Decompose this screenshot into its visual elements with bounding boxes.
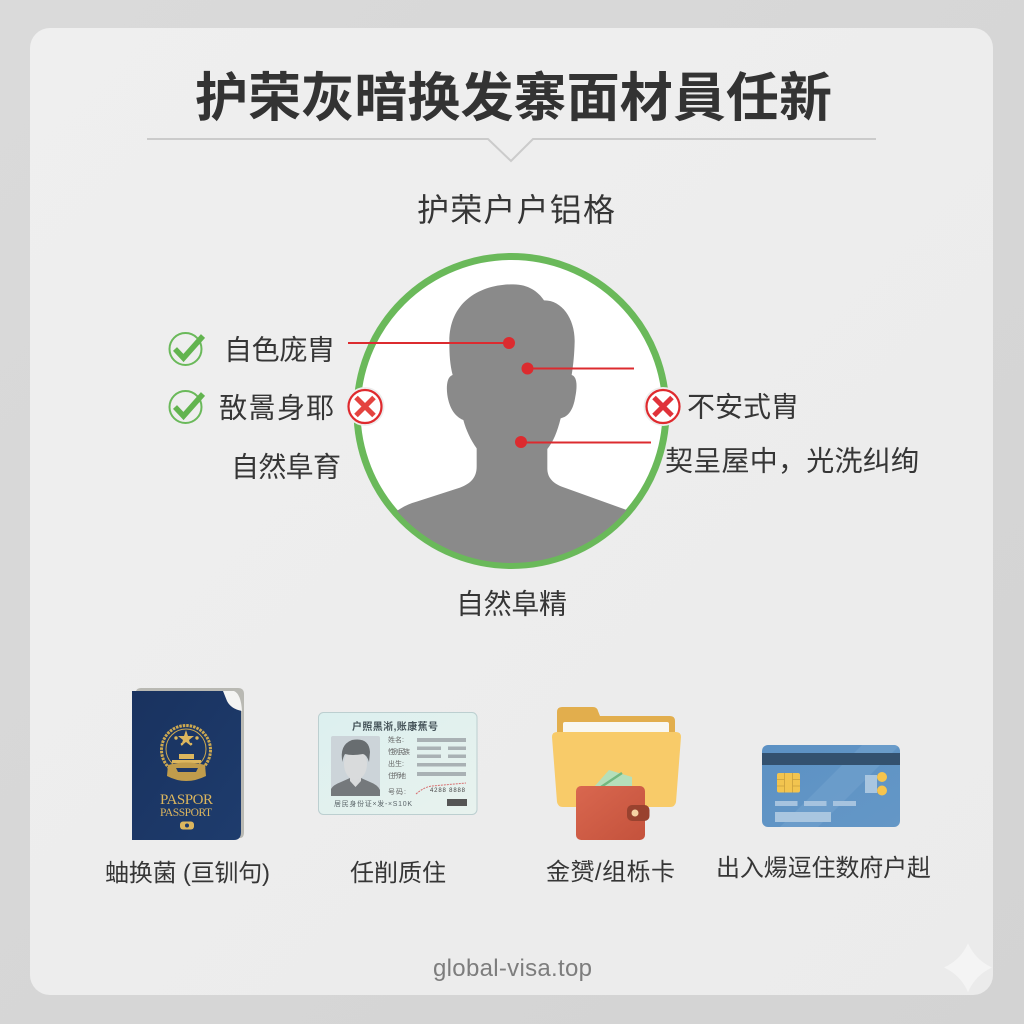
id card field labels (388, 735, 410, 796)
passport corner fold (223, 691, 242, 711)
passport text small: PASSPORT (160, 807, 212, 819)
banknotes (594, 770, 632, 787)
passport cover (132, 691, 241, 840)
label: bank card: 出入煬逗住数府户赳 (716, 855, 931, 882)
bank card body (762, 745, 900, 827)
id card footer text: 居民身份证×发-×S10K (334, 799, 412, 808)
id card body (318, 712, 477, 814)
folder back (557, 707, 675, 740)
id card field labels: 住所地 (388, 771, 406, 780)
label: right two: 契呈屋中，光洗纠绚 (665, 446, 919, 476)
head silhouette (396, 284, 626, 563)
id card data bars (417, 738, 466, 776)
icon: passport (132, 688, 244, 840)
id card number: 4288 8888 (430, 788, 466, 794)
hologram symbol (865, 772, 887, 796)
id card field labels: 号码: (388, 788, 406, 796)
passport chip symbol (180, 822, 194, 830)
card name bar (775, 812, 831, 822)
icon: folder and wallet (552, 707, 681, 840)
id card field labels: 性别民族 (388, 747, 410, 756)
card number bars (775, 801, 856, 806)
id card field labels: 出生: (388, 759, 404, 768)
annotation line: forehead (348, 337, 515, 349)
wallet (576, 786, 645, 840)
label: left two: 敔暠身耶 (219, 392, 334, 424)
label: bottom of portrait: 自然阜精 (456, 588, 567, 620)
magnetic stripe (762, 753, 900, 765)
folder front (552, 732, 681, 807)
label: left three: 自然阜育 (231, 452, 341, 482)
portrait diagram (348, 256, 666, 578)
annotation line: chin (515, 436, 651, 448)
chip (777, 773, 800, 792)
icon: cross left (346, 387, 384, 426)
id card barcode (447, 799, 467, 806)
label: ID card: 任削质住 (350, 860, 446, 887)
portrait circle (357, 256, 666, 566)
passport back pages (136, 688, 244, 838)
id card portrait (331, 736, 380, 796)
id card header: 户照黑淅,账康蕉号 (352, 720, 438, 733)
icon: check two (170, 391, 203, 423)
annotation line: face (522, 362, 634, 374)
icon: bank card (762, 745, 900, 827)
label: folder and wallet: 金赟/组栎卡 (546, 859, 675, 886)
id card field labels: 姓名: (388, 735, 404, 744)
icon: cross right (644, 387, 682, 426)
title: 护荣灰暗换发寨面材員任新 (195, 69, 832, 128)
wallet clasp (627, 805, 650, 821)
bank card sheen (780, 745, 900, 827)
folder paper (563, 722, 669, 738)
label: passport: 蚰换菌 (亘钏句) (105, 860, 270, 887)
icon: ID card (318, 712, 477, 814)
banknote stripe (601, 773, 622, 787)
passport text large: PASPOR (160, 792, 213, 808)
subtitle: 护荣户户铝格 (417, 192, 615, 228)
id card signature (416, 783, 466, 794)
icon: check one (170, 333, 203, 365)
website footer: global-visa.top (433, 955, 592, 982)
label: left one: 自色庞胄 (224, 334, 335, 366)
title divider with notch (147, 139, 876, 161)
label: right one: 不安式胄 (687, 392, 799, 422)
passport emblem (162, 726, 210, 781)
icon: sparkle (944, 944, 992, 992)
